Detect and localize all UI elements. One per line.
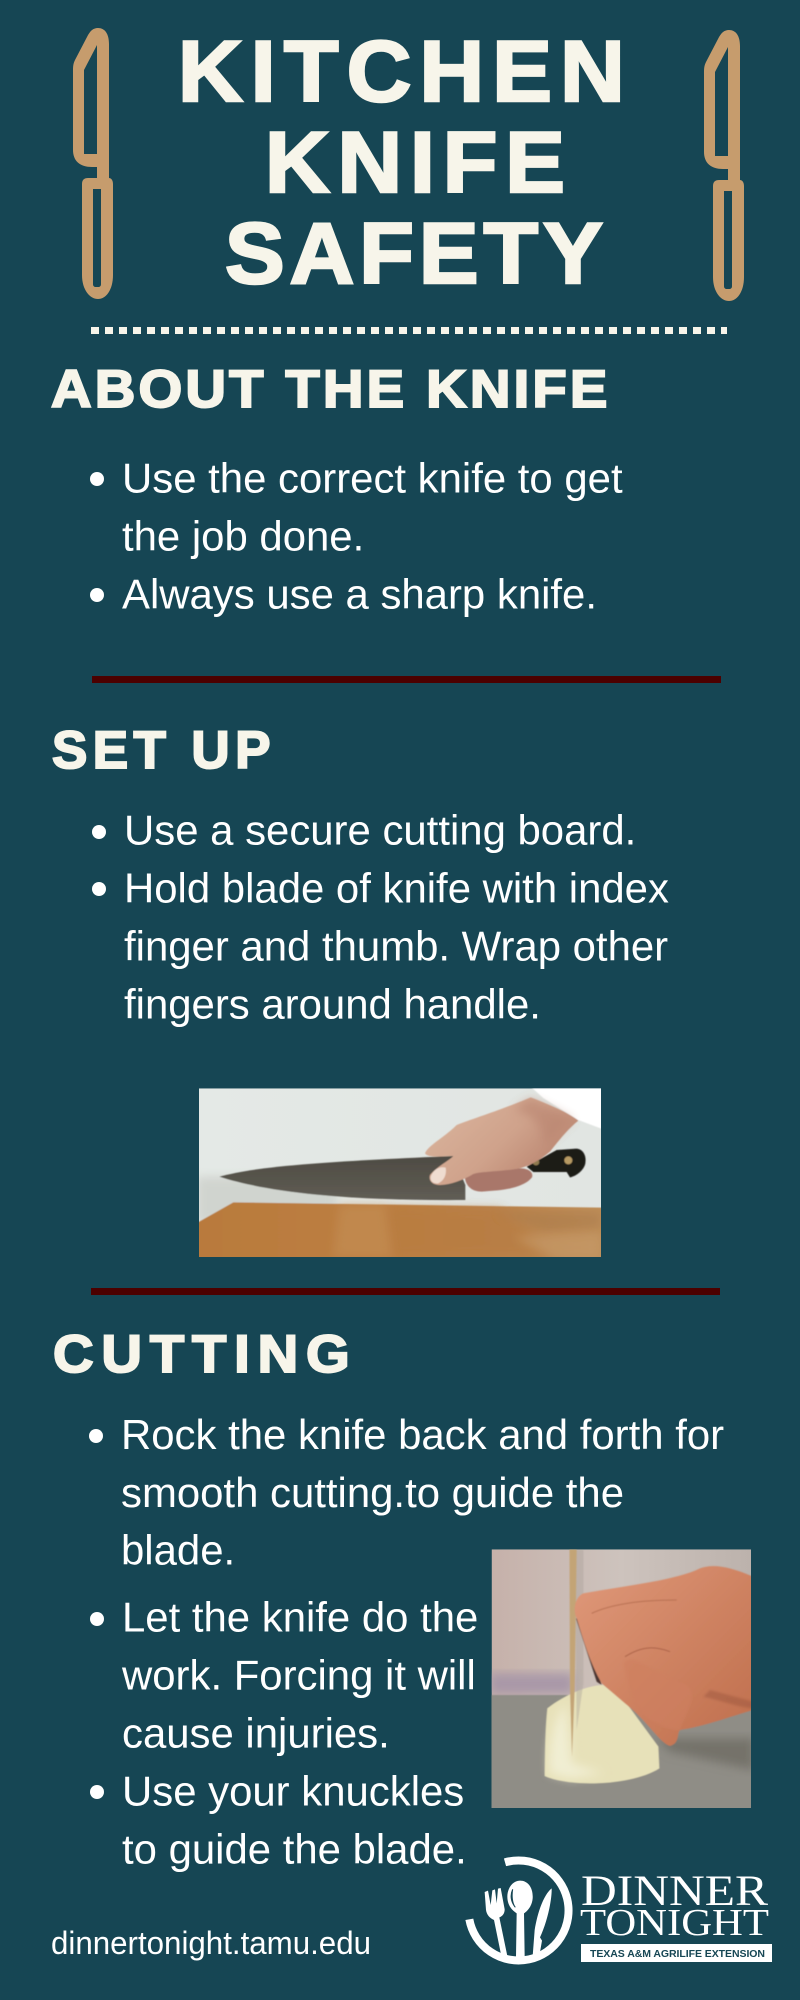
- heading: set up: SET UP: [52, 721, 276, 780]
- bullet list: set up: fingers around handle.: [124, 980, 541, 1028]
- logo: Dinner Tonight: [469, 1860, 772, 1962]
- icon: plate with fork, spoon and knife: [465, 1856, 573, 1964]
- bullet list: set up: Hold blade of knife with index: [124, 864, 669, 912]
- bullet list: set up: finger and thumb. Wrap other: [124, 922, 668, 970]
- photo: fingers guiding blade through onion: [492, 1549, 751, 1808]
- bullet list: about the knife: Always use a sharp knife.: [122, 570, 597, 618]
- bullet list: cutting: Let the knife do the: [122, 1594, 478, 1640]
- title: KNIFE: [265, 115, 573, 211]
- title: KITCHEN: [178, 24, 633, 120]
- bullet list: cutting: Use your knuckles: [122, 1768, 464, 1814]
- heading: about the knife: ABOUT THE KNIFE: [51, 359, 611, 419]
- panel: set up: [52, 721, 669, 1260]
- dotted divider: [91, 327, 727, 334]
- logo wordmark: TEXAS A&M AGRILIFE EXTENSION: [590, 1948, 765, 1960]
- panel: about the knife: [51, 359, 623, 618]
- bullet list: cutting: work. Forcing it will: [121, 1652, 476, 1698]
- title: SAFETY: [225, 206, 608, 302]
- panel: cutting: [53, 1324, 753, 1872]
- photo: hand holding chef knife over board: [199, 1088, 601, 1257]
- logo wordmark: DINNER: [581, 1868, 768, 1915]
- bullet list: set up: Use a secure cutting board.: [124, 806, 636, 854]
- bullet list: set up: [92, 806, 669, 1028]
- bullet list: about the knife: the job done.: [122, 512, 364, 560]
- heading: cutting: CUTTING: [53, 1324, 358, 1384]
- icon: left knife: [73, 28, 113, 299]
- bullet list: cutting: Rock the knife back and forth for: [121, 1411, 724, 1458]
- maroon divider: [92, 676, 721, 683]
- maroon divider: [91, 1288, 720, 1295]
- bullet list: cutting: smooth cutting.to guide the: [121, 1469, 624, 1516]
- bullet list: cutting: [89, 1411, 724, 1872]
- logo wordmark: TONIGHT: [580, 1902, 769, 1944]
- footer url: dinnertonight.tamu.edu: [51, 1925, 371, 1961]
- bullet list: cutting: cause injuries.: [122, 1710, 390, 1756]
- bullet list: about the knife: [90, 454, 623, 618]
- bullet list: cutting: blade.: [121, 1526, 235, 1574]
- logo wordmark: [580, 1868, 772, 1962]
- bullet list: cutting: to guide the blade.: [122, 1826, 467, 1872]
- icon: right knife: [704, 30, 744, 301]
- bullet list: about the knife: Use the correct knife to get: [122, 454, 623, 502]
- title: [178, 24, 633, 302]
